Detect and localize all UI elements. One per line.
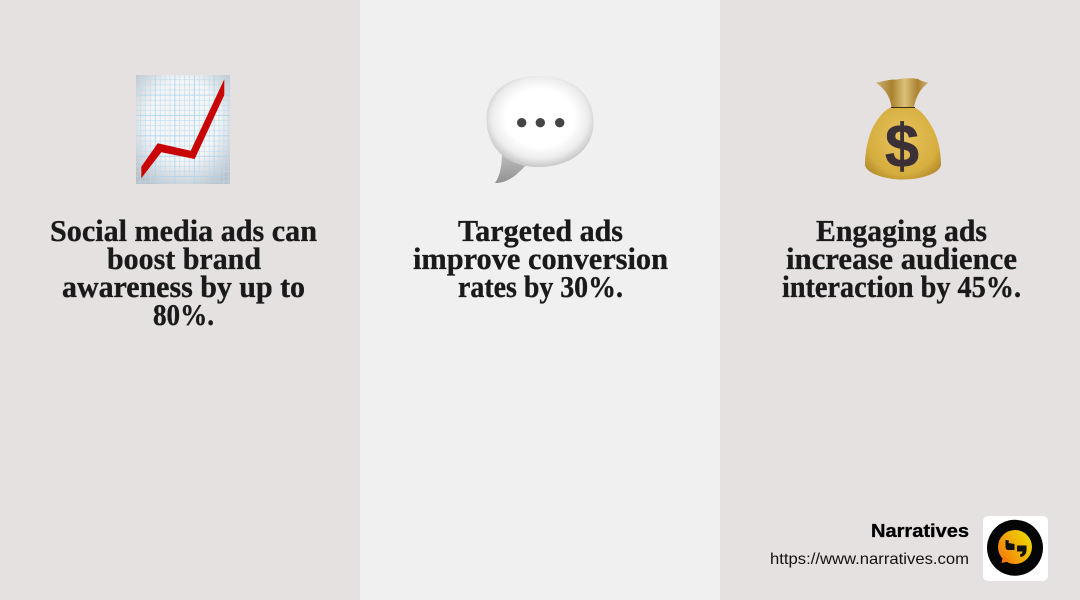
brand name: Narratives (871, 521, 969, 541)
heading: interaction stat: Engaging ads (816, 213, 987, 248)
icon: narratives logo (983, 516, 1048, 581)
icon: money bag: $ (885, 112, 919, 180)
icon: speech bubble (486, 76, 594, 183)
heading: brand awareness stat: Social media ads can (50, 213, 317, 248)
icon: rising chart (136, 75, 230, 184)
footer: brand attribution (770, 516, 1048, 581)
heading: conversion stat: Targeted ads (458, 213, 623, 248)
heading: brand awareness stat: 80%. (153, 297, 214, 332)
icon: money bag (865, 78, 941, 180)
heading: conversion stat (413, 213, 668, 304)
heading: interaction stat: increase audience (786, 241, 1017, 276)
heading: brand awareness stat: boost brand (107, 241, 261, 276)
heading: conversion stat: improve conversion (413, 241, 668, 276)
panel: brand awareness (0, 0, 360, 600)
heading: interaction stat: interaction by 45%. (782, 269, 1021, 304)
panel: conversion rates (360, 0, 720, 600)
panel: audience interaction (720, 0, 1080, 600)
heading: brand awareness stat (50, 213, 317, 332)
heading: interaction stat (782, 213, 1021, 304)
heading: brand awareness stat: awareness by up to (62, 269, 305, 304)
website url: https://www.narratives.com (770, 551, 969, 568)
heading: conversion stat: rates by 30%. (458, 269, 623, 304)
